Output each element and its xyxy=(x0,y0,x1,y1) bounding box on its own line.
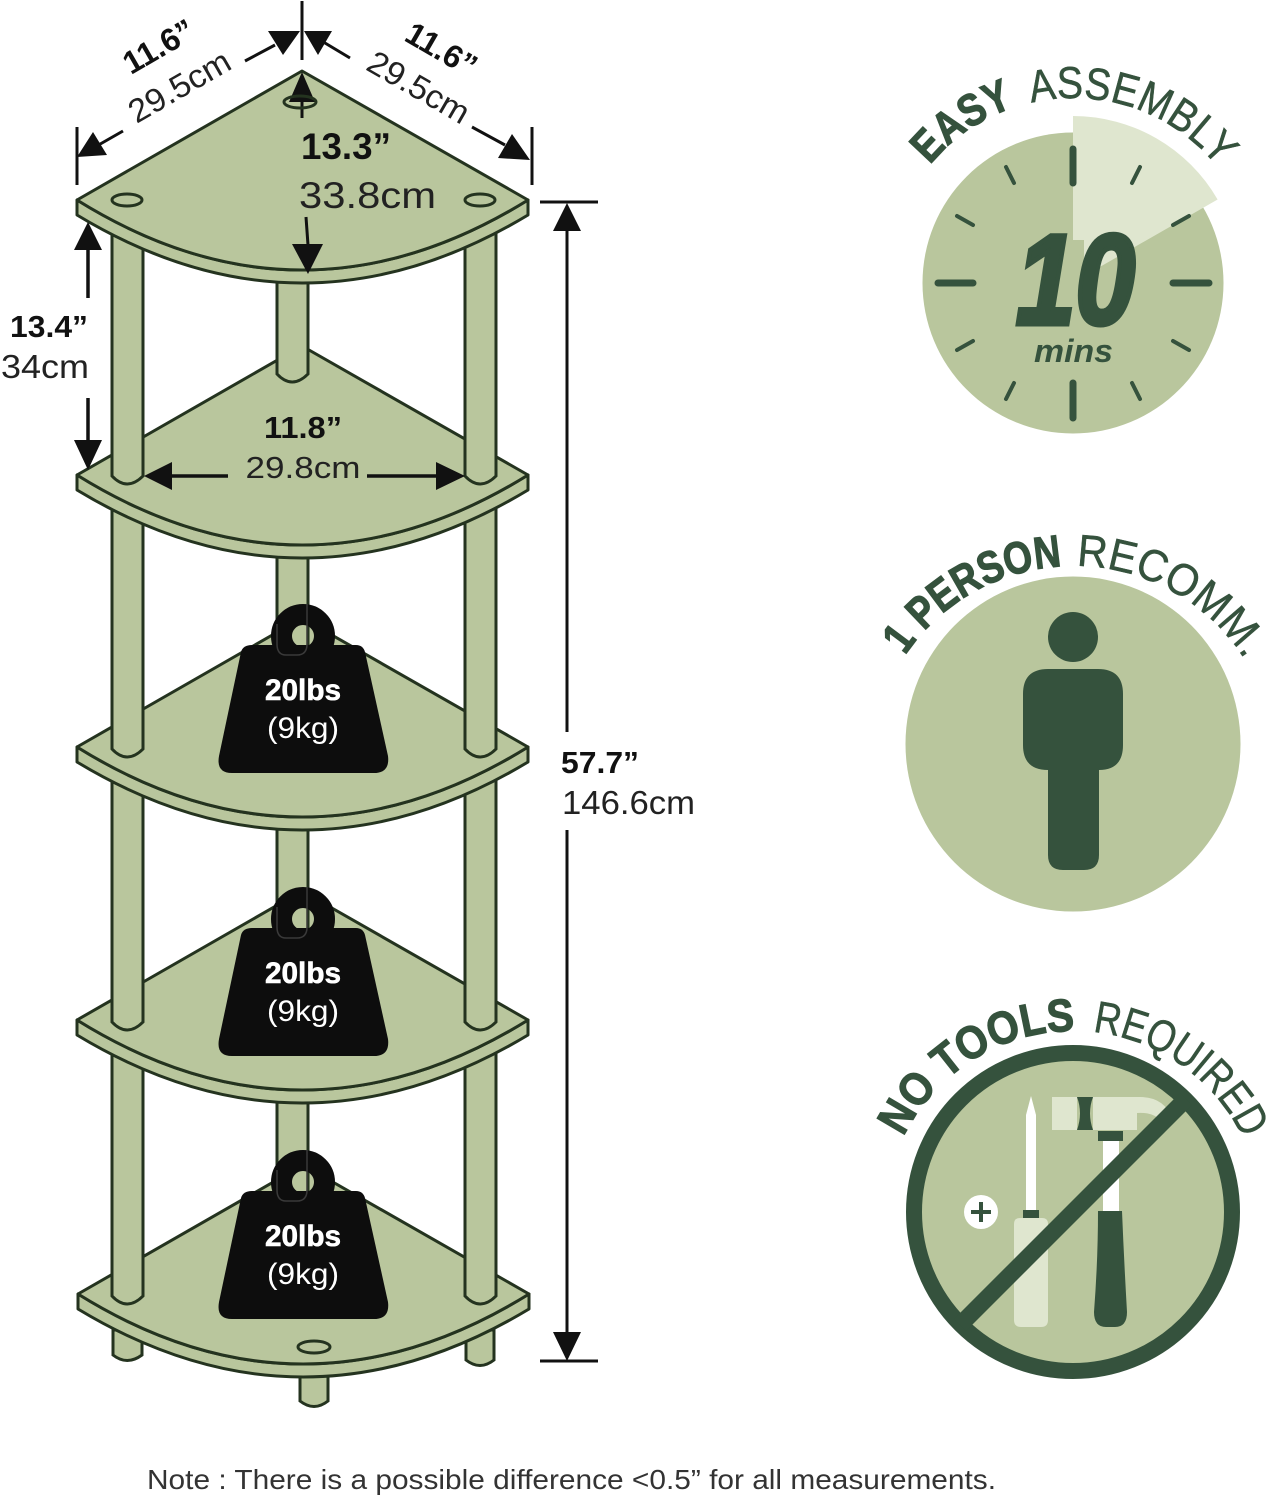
badge: easy assembly: mins xyxy=(1034,333,1113,369)
dimension: left side width xyxy=(77,1,302,185)
dimension: shelf depth: 33.8cm xyxy=(299,175,436,216)
dimension: total height: 57.7” xyxy=(561,745,639,780)
curved heading: EASY xyxy=(908,78,1006,164)
icon: screwdriver xyxy=(1014,1096,1048,1327)
prohibition circle xyxy=(914,1053,1232,1371)
dimension: right side width: 29.5cm xyxy=(361,43,476,131)
weight 2: 20lbs: (9kg) xyxy=(267,995,339,1028)
dimension: total height: 146.6cm xyxy=(562,784,695,821)
weight 1: 20lbs: 20lbs xyxy=(265,674,341,707)
weight 1: 20lbs xyxy=(219,604,388,773)
shelf 4 xyxy=(77,891,528,1103)
weight 3: 20lbs: (9kg) xyxy=(267,1258,339,1291)
weight 1: 20lbs: (9kg) xyxy=(267,712,339,745)
shelf feet xyxy=(113,1330,494,1406)
shelf 2 xyxy=(77,346,528,558)
dimension: inner width xyxy=(144,410,465,490)
dimension: right side width xyxy=(304,15,532,185)
weight 2: 20lbs: 20lbs xyxy=(265,957,341,990)
dimension: left side width: 29.5cm xyxy=(122,42,237,130)
curved heading: 1 PERSON xyxy=(884,534,1060,654)
dimension: inner width: 29.8cm xyxy=(246,450,360,485)
badge: easy assembly xyxy=(908,66,1241,434)
badge circle xyxy=(906,576,1240,912)
posts between shelf 4 and 3 xyxy=(112,775,496,1030)
weight 2: 20lbs xyxy=(219,887,388,1056)
footnote: Note : There is a possible difference <0.5” for all measurements. xyxy=(147,1464,996,1495)
posts between shelf 2 and 1 xyxy=(112,225,496,484)
dimension: shelf depth: 13.3” xyxy=(301,126,391,167)
weight 3: 20lbs xyxy=(219,1150,388,1319)
posts between shelf 3 and 2 xyxy=(112,500,496,757)
curved heading: NO TOOLS xyxy=(876,998,1074,1136)
badge: no tools required xyxy=(876,998,1266,1379)
prohibition slash xyxy=(960,1099,1186,1325)
dimension: total height xyxy=(540,202,695,1361)
icon: person xyxy=(1023,612,1123,870)
badge: one person recommended xyxy=(884,534,1260,912)
clock face xyxy=(922,132,1224,434)
icon: screw head xyxy=(964,1195,998,1229)
10 mins label: 10 xyxy=(1016,209,1135,352)
dimension: right side width: 11.6” xyxy=(399,15,484,84)
clock ticks xyxy=(938,149,1209,418)
dimension: left side width: 11.6” xyxy=(116,12,201,81)
corner shelf unit xyxy=(77,71,529,1406)
bottom shelf hole xyxy=(298,1341,330,1353)
dimension: shelf depth xyxy=(284,72,436,274)
dimension: shelf spacing xyxy=(1,222,102,470)
dimension: inner width: 11.8” xyxy=(264,410,342,445)
badge: easy assembly: ASSEMBLY xyxy=(1031,66,1241,160)
shelf 3 xyxy=(77,618,528,830)
ten minute wedge xyxy=(1073,116,1218,276)
posts between shelf 5 and 4 xyxy=(112,1050,496,1304)
dimension: shelf spacing: 13.4” xyxy=(10,309,88,344)
weight 3: 20lbs: 20lbs xyxy=(265,1220,341,1253)
icon: hammer xyxy=(1052,1097,1172,1327)
top shelf holes xyxy=(112,194,495,206)
shelf 5 xyxy=(78,1165,529,1377)
dimension: shelf spacing: 34cm xyxy=(1,348,89,385)
top shelf xyxy=(77,71,528,283)
